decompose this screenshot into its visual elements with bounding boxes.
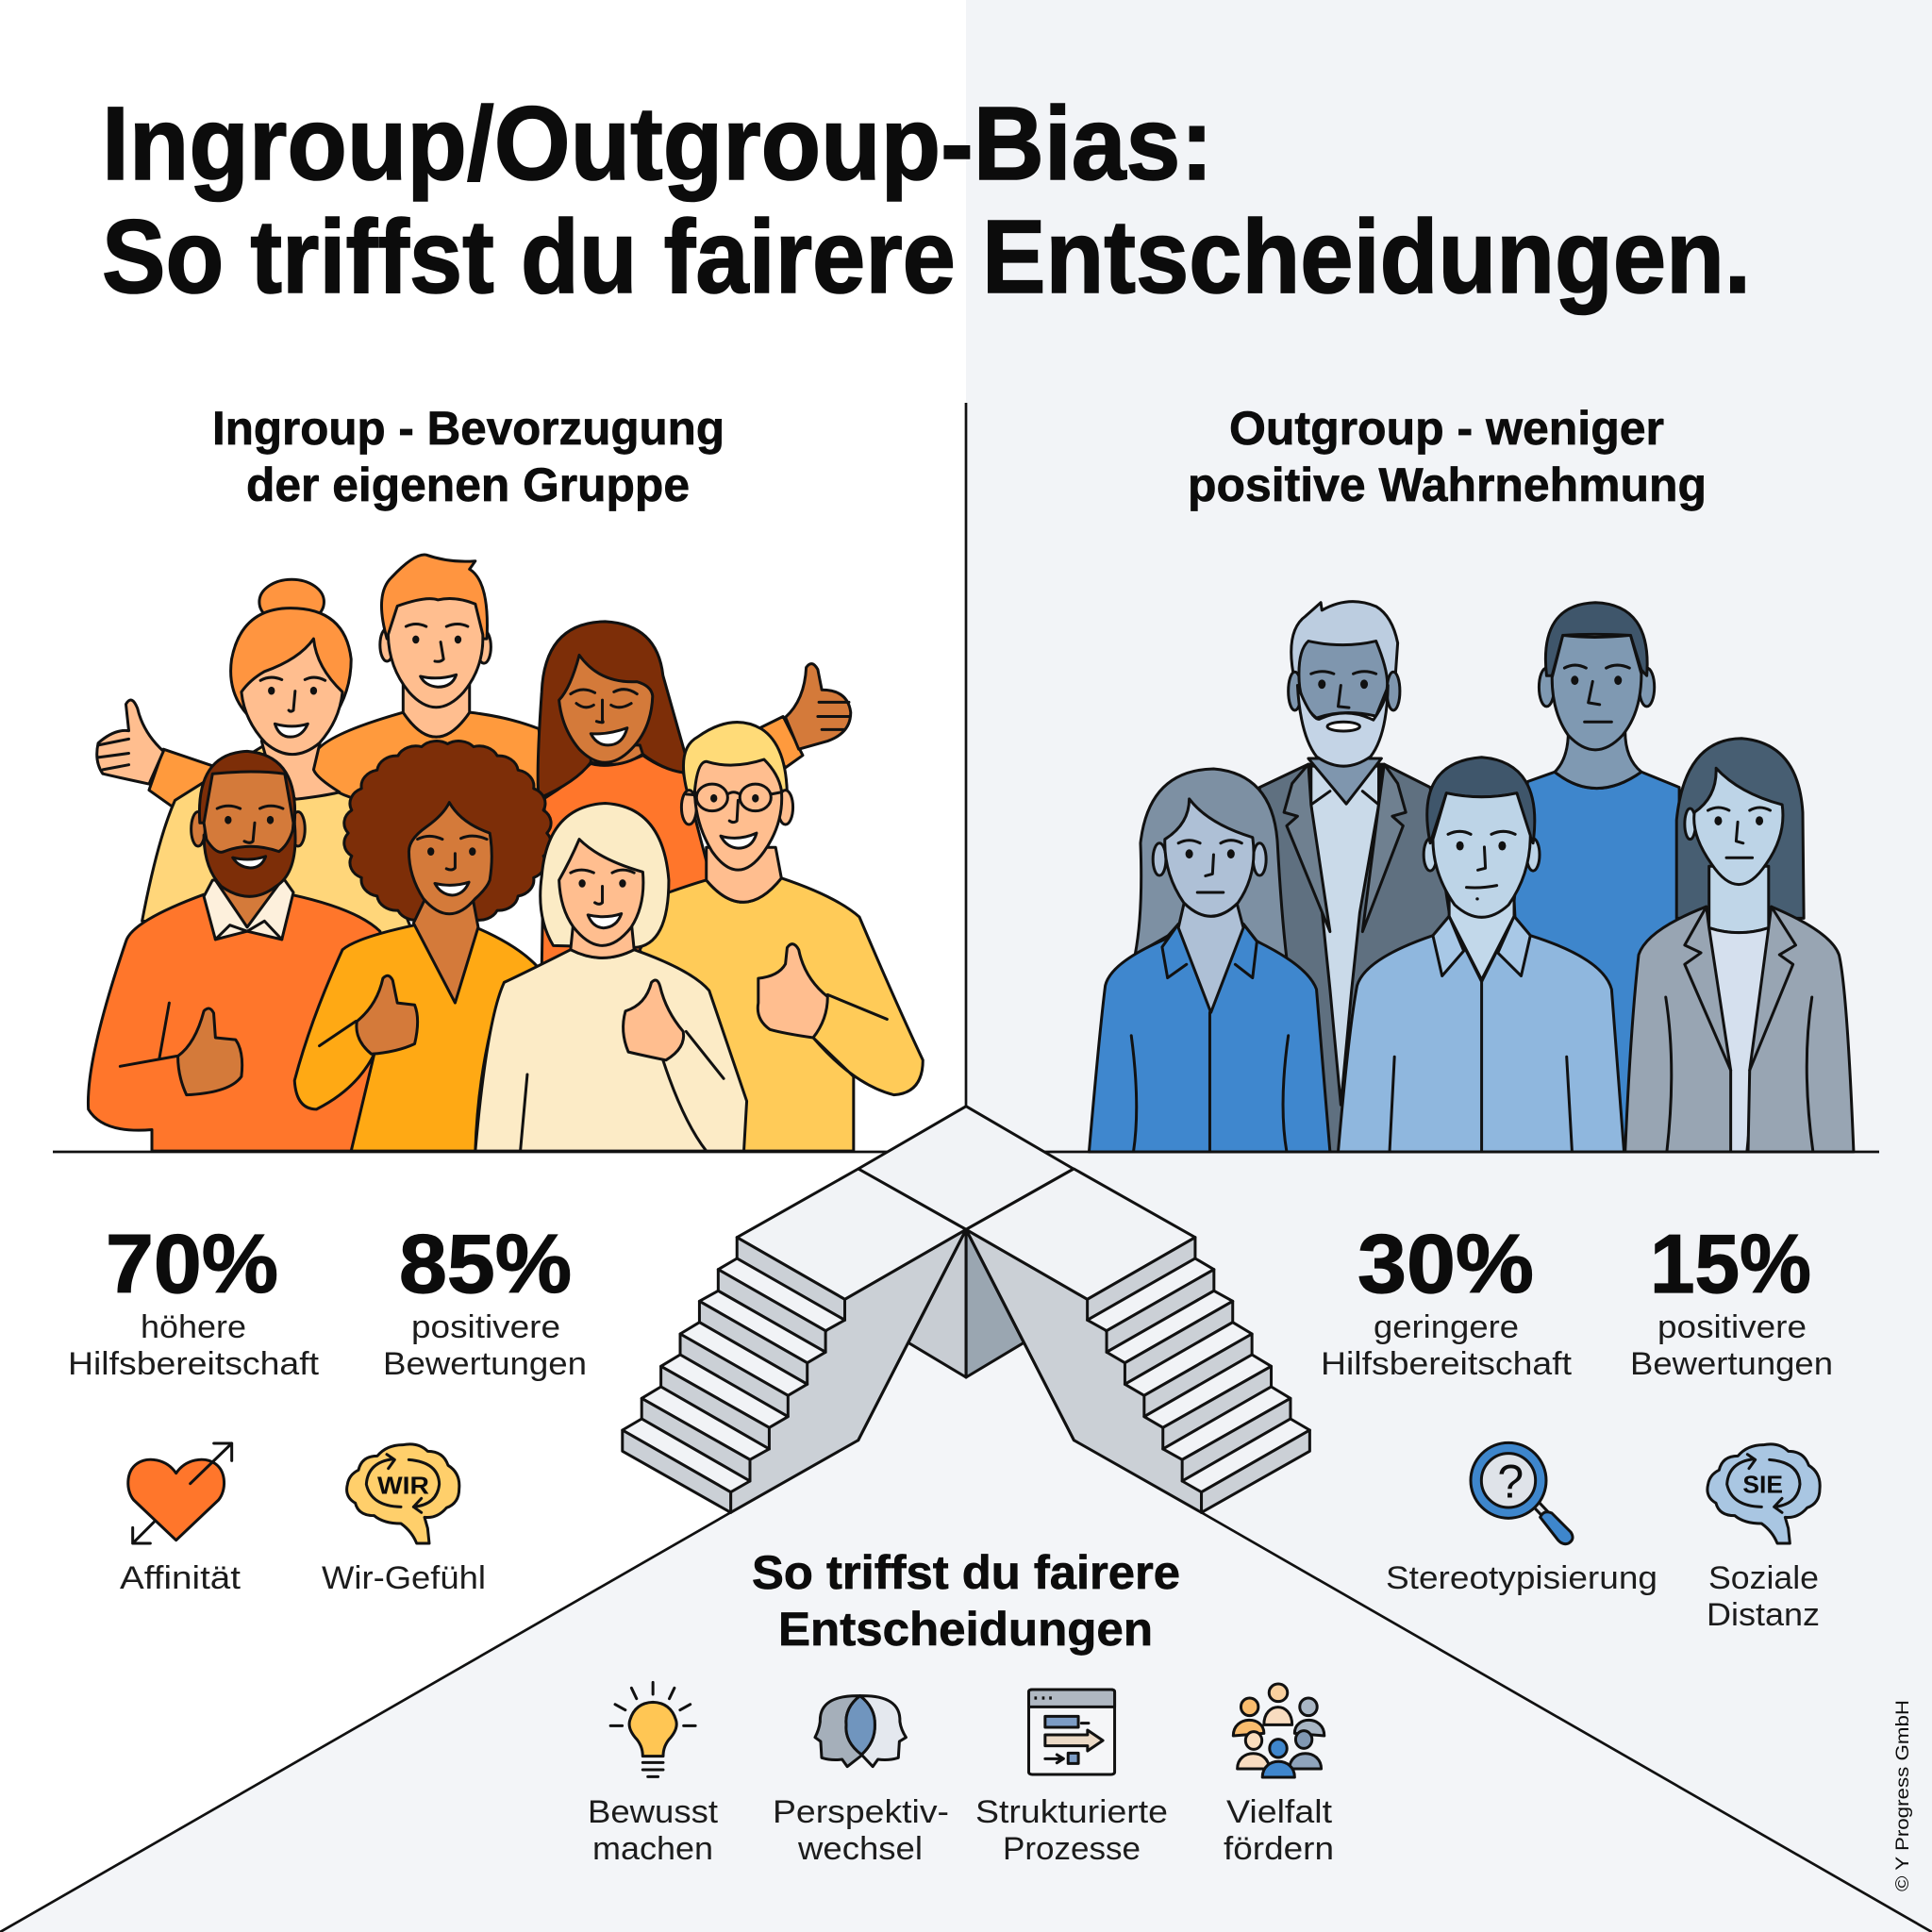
background: left panel xyxy=(0,0,966,1932)
blond man with glasses xyxy=(640,723,923,1151)
label: Stereotypisierung: Stereotypisierung xyxy=(1386,1560,1657,1596)
icon: brain SIE xyxy=(1707,1444,1820,1543)
bearded man xyxy=(88,751,403,1151)
label: Vielfalt fördern: fördern xyxy=(1224,1831,1334,1867)
stat: 70% xyxy=(68,1217,320,1382)
woman back right long hair xyxy=(538,622,712,968)
label: Soziale Distanz: Soziale xyxy=(1708,1560,1819,1596)
label: Vielfalt fördern xyxy=(1224,1794,1334,1867)
woman with afro xyxy=(294,741,551,1151)
stat: 70%: 70% xyxy=(106,1217,278,1310)
stat: 30%: Hilfsbereitschaft xyxy=(1321,1346,1573,1382)
stat: 30%: 30% xyxy=(1357,1217,1534,1310)
label: Strukturierte Prozesse: Prozesse xyxy=(1003,1831,1141,1867)
heading: outgroup: positive Wahrnehmung xyxy=(1188,458,1707,511)
label: Affinität: Affinität xyxy=(120,1560,242,1596)
thumb hand far right xyxy=(758,664,851,768)
stat: 15%: positivere xyxy=(1657,1309,1807,1345)
heading: ingroup: der eigenen Gruppe xyxy=(246,458,690,511)
label: Perspektivwechsel xyxy=(773,1794,949,1867)
icon: brain SIE: SIE xyxy=(1742,1471,1783,1499)
label: Strukturierte Prozesse xyxy=(975,1794,1168,1867)
label: Bewusst machen: machen xyxy=(592,1831,713,1867)
title: So triffst du fairere Entscheidungen. xyxy=(102,199,1751,315)
older man in suit xyxy=(1259,602,1484,1152)
title xyxy=(102,86,1751,315)
heading: ingroup xyxy=(212,402,724,511)
man top centre head xyxy=(380,555,491,737)
man in light blue shirt xyxy=(1338,758,1624,1152)
icon: magnifier: ? xyxy=(1497,1455,1524,1507)
label: Bewusst machen xyxy=(588,1794,719,1867)
heading: ingroup: Ingroup - Bevorzugung xyxy=(212,402,724,455)
right staircase xyxy=(966,1169,1309,1512)
woman in grey blazer xyxy=(1625,739,1854,1152)
stat: 85% xyxy=(383,1217,587,1382)
heading: fair decisions xyxy=(752,1546,1180,1656)
copyright: © Y Progress GmbH xyxy=(1893,1700,1913,1891)
title: Ingroup/Outgroup-Bias: xyxy=(102,86,1213,202)
label: Perspektivwechsel: wechsel xyxy=(797,1831,923,1867)
stat: 15%: Bewertungen xyxy=(1630,1346,1833,1382)
heading: outgroup xyxy=(1188,402,1707,511)
heading: outgroup: Outgroup - weniger xyxy=(1229,402,1664,455)
icon: brain WIR: WIR xyxy=(377,1471,429,1499)
icon: light bulb xyxy=(610,1682,695,1776)
stat: 30%: geringere xyxy=(1374,1309,1519,1345)
background: right panel xyxy=(966,0,1932,1932)
label: Strukturierte Prozesse: Strukturierte xyxy=(975,1794,1168,1830)
man top centre shirt xyxy=(149,712,547,823)
stat: 15%: 15% xyxy=(1650,1217,1811,1310)
heading: fair decisions: So triffst du fairere xyxy=(752,1546,1180,1599)
top landing xyxy=(858,1107,1074,1229)
woman with bun xyxy=(142,579,415,938)
icon: two heads overlapping xyxy=(815,1696,906,1767)
illustration: isometric stairs xyxy=(623,1107,1309,1512)
stat: 70%: Hilfsbereitschaft xyxy=(68,1346,320,1382)
stat: 85%: 85% xyxy=(399,1217,572,1310)
icon: heart with arrow xyxy=(128,1443,232,1543)
man in blue t-shirt xyxy=(1514,603,1679,1152)
centre pillar xyxy=(908,1229,1024,1377)
icon: brain WIR xyxy=(347,1444,459,1543)
label: Perspektivwechsel: Perspektiv- xyxy=(773,1794,949,1830)
background: bottom triangle panel xyxy=(0,1330,1932,1932)
woman in blue blouse xyxy=(1089,769,1330,1152)
icon: process window xyxy=(1029,1690,1115,1774)
label: Bewusst machen: Bewusst xyxy=(588,1794,719,1830)
stat: 15% xyxy=(1630,1217,1833,1382)
label: Soziale Distanz: Distanz xyxy=(1707,1597,1820,1633)
icon: diverse people xyxy=(1233,1684,1324,1777)
blonde woman in cream xyxy=(475,803,747,1151)
stat: 85%: Bewertungen xyxy=(383,1346,587,1382)
label: Vielfalt fördern: Vielfalt xyxy=(1226,1794,1333,1830)
left staircase xyxy=(623,1169,966,1512)
stat: 85%: positivere xyxy=(411,1309,560,1345)
illustration: outgroup people xyxy=(1089,602,1854,1152)
icon: magnifier xyxy=(1471,1442,1573,1544)
label: Soziale Distanz xyxy=(1707,1560,1820,1633)
stat: 70%: höhere xyxy=(141,1309,246,1345)
heading: fair decisions: Entscheidungen xyxy=(778,1603,1153,1656)
label: Wir-Gefühl: Wir-Gefühl xyxy=(322,1560,486,1596)
stat: 30% xyxy=(1321,1217,1573,1382)
thumb hand far left xyxy=(97,700,163,784)
illustration: ingroup people xyxy=(88,555,923,1151)
